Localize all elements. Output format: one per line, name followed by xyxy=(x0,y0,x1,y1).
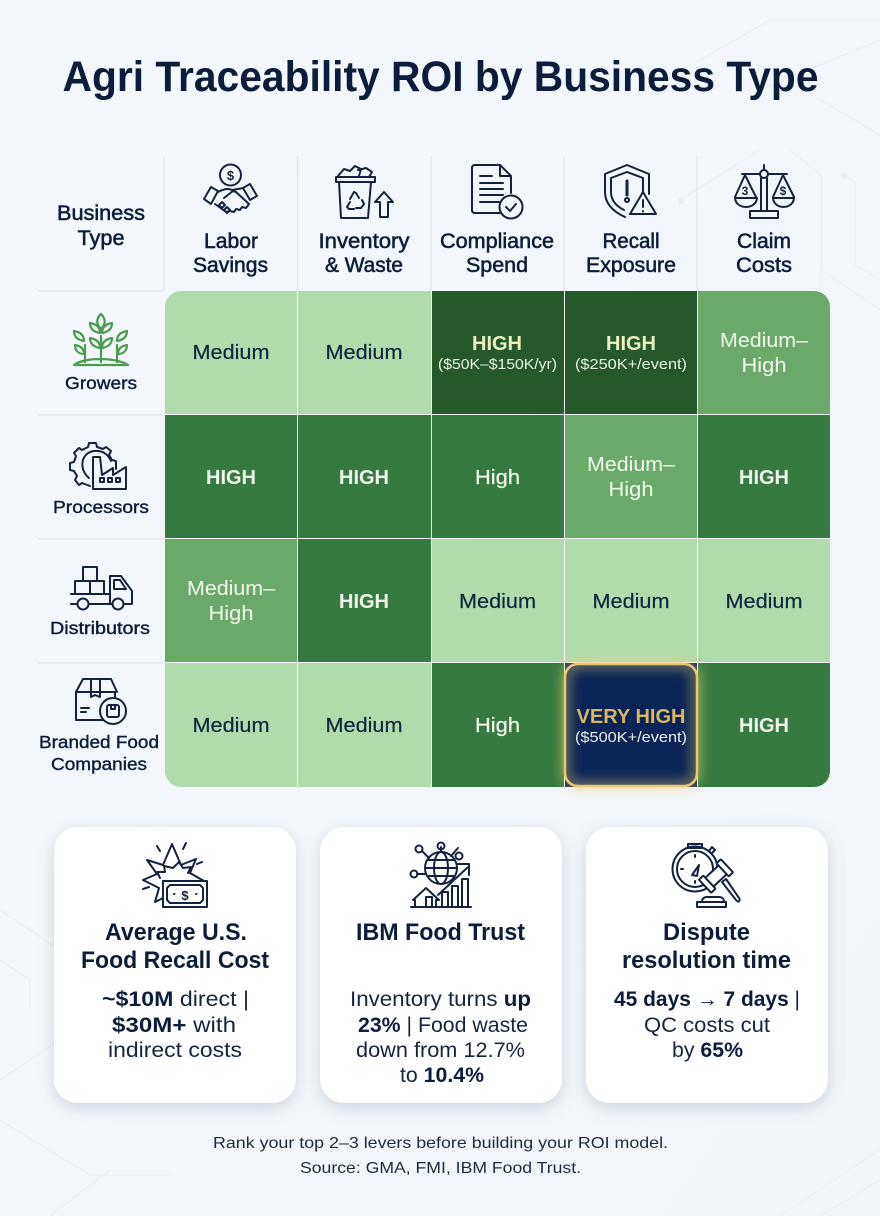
cell text: distributors: HIGH xyxy=(339,591,389,613)
cell text: distributors: Medium– xyxy=(187,578,276,600)
label: Distributors xyxy=(50,618,150,638)
row label: distributors xyxy=(50,567,150,638)
row label: processors xyxy=(53,443,149,517)
heading: business type xyxy=(57,202,145,250)
icon: burst and banknote: $ xyxy=(181,888,189,903)
card body xyxy=(614,988,800,1062)
card body: down from 12.7% xyxy=(356,1039,525,1062)
card body: Inventory turns up xyxy=(350,988,531,1011)
label: Branded Food xyxy=(39,732,159,752)
icon: stopwatch and gavel xyxy=(672,844,740,907)
cell text: distributors: Medium xyxy=(459,591,536,613)
icon: parcel box xyxy=(76,679,126,724)
icon: document with check xyxy=(472,165,522,218)
panel: recall cost card xyxy=(54,827,296,1103)
column label: Claim xyxy=(737,230,791,253)
card heading xyxy=(622,919,791,974)
heat map fills xyxy=(165,291,830,787)
column: recall exposure xyxy=(586,165,676,277)
card body: ~$10M direct | xyxy=(102,988,249,1011)
card body xyxy=(102,988,249,1062)
callout: very high recall exposure: ($500K+/event) xyxy=(575,730,687,746)
column label xyxy=(736,230,792,277)
cell text: processors: HIGH xyxy=(339,467,389,489)
label: Companies xyxy=(51,754,147,774)
label: Processors xyxy=(53,497,149,517)
cell text: processors xyxy=(206,454,789,501)
card body: 45 days → 7 days | xyxy=(614,988,800,1011)
title: Agri Traceability ROI by Business Type xyxy=(62,53,818,101)
cell text: growers: HIGH xyxy=(606,333,656,355)
heading: business type: Type xyxy=(78,227,124,250)
cell text: growers: ($50K–$150K/yr) xyxy=(438,357,557,373)
cell text: distributors: Medium xyxy=(726,591,802,613)
panel: heat map xyxy=(165,291,830,787)
icon: globe network and growth chart xyxy=(410,842,471,907)
row label: growers xyxy=(65,314,137,393)
panel: dispute resolution card xyxy=(586,827,828,1103)
column label: Exposure xyxy=(586,254,676,277)
icon: gear and factory xyxy=(70,443,126,489)
icon: burst and banknote xyxy=(143,843,207,907)
cell text: processors: High xyxy=(475,467,520,489)
cell text: growers: Medium xyxy=(192,342,270,364)
footer note: Rank your top 2–3 levers before building your ROI model. xyxy=(213,1135,668,1152)
card heading: Food Recall Cost xyxy=(81,947,269,974)
panel: IBM Food Trust card xyxy=(320,827,562,1103)
card heading: Dispute xyxy=(663,919,750,946)
icon: balance scales: 3 xyxy=(742,184,749,198)
cell text: distributors: Medium xyxy=(592,591,670,613)
card heading: IBM Food Trust xyxy=(356,919,525,946)
footer note: Source: GMA, FMI, IBM Food Trust. xyxy=(300,1160,581,1177)
column label: & Waste xyxy=(325,254,403,277)
icon: delivery truck xyxy=(71,567,132,610)
column label: Compliance xyxy=(440,230,554,253)
card body xyxy=(350,988,531,1087)
cell text: processors: HIGH xyxy=(739,467,789,489)
column: inventory and waste xyxy=(318,166,410,277)
column label: Costs xyxy=(736,254,792,277)
card body: $30M+ with xyxy=(112,1014,236,1037)
callout: very high recall exposure: VERY HIGH xyxy=(576,706,686,728)
cell text: processors: HIGH xyxy=(206,467,256,489)
column label xyxy=(586,230,676,277)
column: compliance spend xyxy=(440,165,554,277)
column label xyxy=(318,230,410,277)
icon: plant sprouts xyxy=(74,314,128,365)
cell text: distributors xyxy=(187,578,802,625)
heading: business type: Business xyxy=(57,202,145,225)
card body: indirect costs xyxy=(108,1039,242,1062)
cell text: growers: Medium– xyxy=(720,330,809,352)
cell text: growers xyxy=(192,330,809,377)
icon: handshake and coin: $ xyxy=(227,168,235,183)
cell text: branded food companies: High xyxy=(475,715,520,737)
icon: balance scales: $ xyxy=(780,184,787,198)
column label xyxy=(440,230,554,277)
card heading xyxy=(81,919,269,974)
column: claim costs xyxy=(735,165,794,277)
card heading: resolution time xyxy=(622,947,791,974)
icon: recycling bin with up arrow xyxy=(336,166,393,218)
cell text: processors: High xyxy=(608,479,654,501)
card body: to 10.4% xyxy=(400,1064,484,1087)
card body: by 65% xyxy=(672,1039,743,1062)
icon: balance scales xyxy=(735,165,794,218)
cell text: branded food companies: Medium xyxy=(326,715,402,737)
column label: Recall xyxy=(602,230,660,253)
cell text: growers: High xyxy=(742,355,786,377)
cell text: branded food companies: HIGH xyxy=(739,715,789,737)
footer note xyxy=(213,1135,668,1177)
cell text: distributors: High xyxy=(208,603,254,625)
row label: branded food companies xyxy=(39,679,159,774)
label: Growers xyxy=(65,373,137,393)
column: labor savings xyxy=(193,164,268,277)
callout: very high recall exposure xyxy=(564,663,698,787)
label xyxy=(39,732,159,774)
cell text: branded food companies: Medium xyxy=(192,715,270,737)
column label: Inventory xyxy=(318,230,410,253)
card heading: Average U.S. xyxy=(105,919,247,946)
column label: Spend xyxy=(466,254,528,277)
column label xyxy=(193,230,268,277)
cell text: growers: Medium xyxy=(326,342,402,364)
column label: Savings xyxy=(193,254,268,277)
cell text: branded food companies xyxy=(192,715,789,737)
card body: 23% | Food waste xyxy=(358,1014,528,1037)
card body: QC costs cut xyxy=(644,1014,770,1037)
cell text: growers: ($250K+/event) xyxy=(575,357,687,373)
panel: ROI matrix header lines xyxy=(38,156,821,663)
cell text: processors: Medium– xyxy=(587,454,676,476)
icon: shield and warning xyxy=(605,165,656,217)
cell text: growers: HIGH xyxy=(472,333,522,355)
column label: Labor xyxy=(204,230,258,253)
